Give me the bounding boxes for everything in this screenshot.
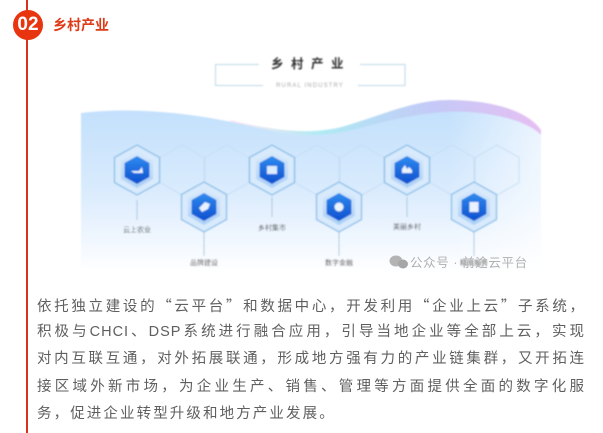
hex labels: 乡村集市 [258, 223, 286, 232]
section heading: 乡村产业 [53, 17, 109, 33]
hex icon: 精准服务 [452, 182, 496, 232]
body paragraph: 对内互联互通，对外拓展联通，形成地方强有力的产业链集群，又开拓连 [37, 351, 585, 367]
section number badge [13, 10, 43, 40]
wave ribbon [230, 100, 541, 150]
watermark icon [390, 256, 408, 268]
body paragraph: 积极与CHCI、DSP系统进行融合应用，引导当地企业等全部上云，实现 [37, 324, 585, 340]
right fade [468, 113, 542, 245]
hex labels: 精准服务 [460, 258, 488, 267]
body paragraph: 接区域外新市场，为企业生产、销售、管理等方面提供全面的数字化服 [37, 379, 585, 395]
section number badge: 02 [17, 14, 39, 35]
stem lines [137, 197, 474, 256]
hex labels: 数字金融 [325, 258, 353, 267]
body paragraph: 务，促进企业转型升级和地方产业发展。 [37, 406, 336, 422]
connector outlines [160, 145, 519, 195]
watermark text: 公众号 · 前途云平台 [410, 255, 528, 270]
hex icon: 乡村集市 [250, 145, 294, 195]
title frame right [358, 64, 405, 86]
body paragraph: 依托独立建设的“云平台”和数据中心，开发利用“企业上云”子系统， [37, 295, 585, 316]
wave background [81, 111, 541, 272]
hex labels: 美丽乡村 [393, 222, 421, 231]
hex labels: 云上农业 [123, 225, 151, 234]
hex labels: 品牌建设 [190, 258, 218, 267]
title frame left [216, 64, 263, 86]
hex icon: 美丽乡村 [384, 145, 430, 195]
illustration title: 乡村产业 [271, 56, 351, 71]
illustration [80, 56, 542, 270]
illustration subtitle: RURAL INDUSTRY [276, 83, 344, 89]
hex icon: 数字金融 [316, 182, 362, 232]
timeline vertical line [26, 0, 28, 433]
hex icon: 品牌建设 [182, 182, 226, 232]
hex labels [123, 222, 488, 267]
body paragraph [37, 295, 585, 422]
hex icon: 云上农业 [114, 145, 160, 195]
